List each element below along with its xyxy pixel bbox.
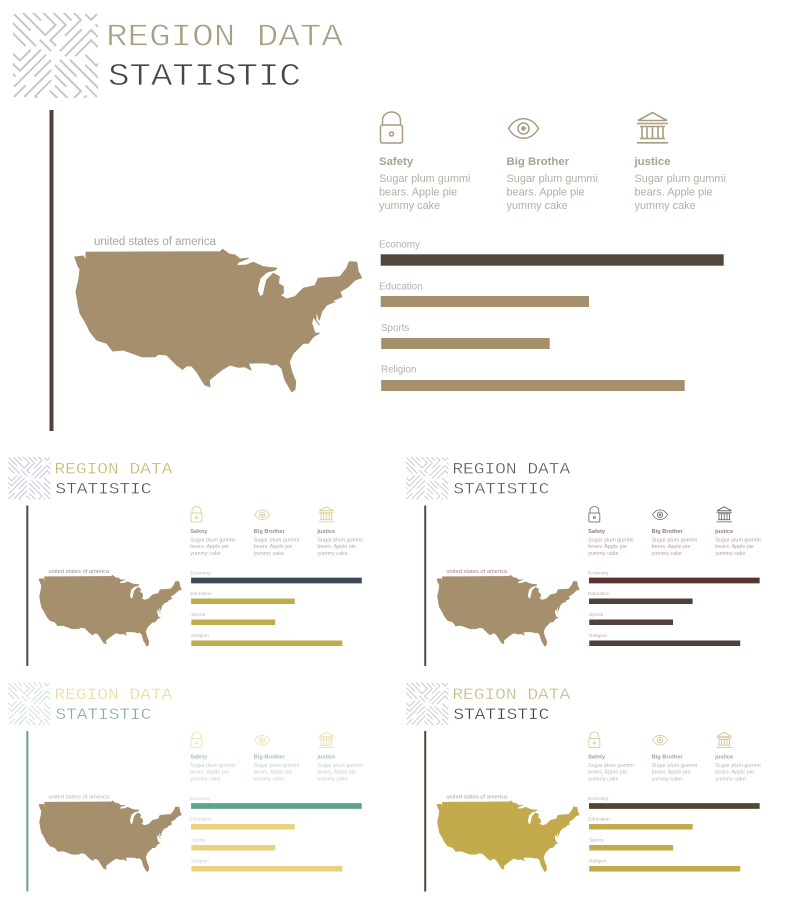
- bar chart: Economy: [190, 570, 211, 576]
- text block: big brother: yummy cake: [652, 551, 682, 557]
- text block: big brother: [652, 529, 697, 557]
- title: REGION DATA: [54, 461, 173, 479]
- bar chart: Religion: [191, 633, 209, 639]
- bar chart: Economy: [588, 796, 609, 802]
- bar chart: Religion: [589, 858, 607, 864]
- text block: safety: bears. Apple pie: [190, 544, 229, 550]
- text block: big brother: yummy cake: [254, 776, 284, 783]
- text block: safety: Sugar plum gummi: [190, 537, 236, 544]
- bar chart: Religion: [589, 633, 607, 639]
- map: USA: [39, 575, 182, 646]
- bar chart: [190, 570, 362, 646]
- text block: safety: yummy cake: [190, 551, 221, 557]
- text block: safety: [190, 754, 236, 783]
- text block: safety: bears. Apple pie: [190, 770, 229, 776]
- text block: big brother: bears. Apple pie: [254, 544, 292, 550]
- bar chart: Education: [588, 817, 610, 823]
- text block: safety: Safety: [588, 529, 606, 535]
- map: USA: [75, 249, 362, 392]
- title: [106, 20, 344, 95]
- panel: blue and gold variant: [0, 438, 363, 666]
- text block: big brother: [652, 754, 697, 783]
- icon: temple: [319, 507, 334, 522]
- bar chart: Sports: [191, 837, 206, 844]
- icon: temple: [319, 732, 334, 747]
- map label: united states of america: [446, 569, 508, 575]
- text block: justice: Sugar plum gummi: [634, 173, 726, 185]
- bar chart: Economy: [190, 796, 211, 802]
- map label: united states of america: [48, 794, 110, 801]
- text block: safety: yummy cake: [588, 551, 619, 557]
- text block: big brother: Sugar plum gummi: [506, 173, 598, 185]
- bar chart: Religion: [381, 365, 416, 376]
- text block: safety: Safety: [379, 156, 414, 168]
- icon: temple: [637, 112, 668, 143]
- map label: united states of america: [446, 794, 508, 801]
- bar chart: [588, 796, 760, 872]
- icon: eye: [255, 735, 270, 745]
- text block: justice: justice: [316, 754, 335, 761]
- pattern tile: [0, 0, 137, 137]
- text block: justice: [316, 754, 363, 783]
- text block: big brother: [254, 754, 299, 783]
- map label: united states of america: [48, 569, 110, 575]
- text block: justice: Sugar plum gummi: [715, 763, 761, 769]
- icon: lock: [380, 112, 402, 143]
- title: REGION DATA: [106, 20, 344, 56]
- pattern tile: [0, 438, 70, 519]
- icon: temple: [717, 732, 732, 747]
- text block: big brother: yummy cake: [652, 776, 682, 783]
- text block: safety: bears. Apple pie: [588, 544, 627, 550]
- text block: safety: [588, 754, 634, 783]
- text block: big brother: yummy cake: [506, 200, 568, 212]
- text block: safety: [190, 529, 236, 557]
- text block: justice: yummy cake: [317, 551, 348, 557]
- text block: safety: Sugar plum gummi: [588, 763, 634, 769]
- title: REGION DATA: [452, 687, 571, 705]
- panel: dark and gold variant: [387, 663, 761, 892]
- icon: lock: [191, 506, 202, 522]
- text block: justice: justice: [714, 529, 733, 535]
- text block: justice: justice: [714, 754, 733, 761]
- text block: big brother: Sugar plum gummi: [652, 537, 697, 544]
- title: STATISTIC: [55, 481, 151, 499]
- title: REGION DATA: [452, 461, 571, 479]
- text block: big brother: [254, 529, 299, 557]
- bar chart: Sports: [191, 612, 206, 618]
- text block: justice: Sugar plum gummi: [317, 537, 363, 544]
- title: STATISTIC: [108, 60, 301, 95]
- title: STATISTIC: [453, 707, 549, 725]
- text block: safety: bears. Apple pie: [379, 186, 457, 198]
- title: STATISTIC: [453, 481, 549, 499]
- text block: justice: yummy cake: [715, 776, 746, 783]
- vertical rule: [424, 506, 426, 666]
- text block: safety: Sugar plum gummi: [379, 173, 470, 185]
- text block: safety: [588, 529, 634, 557]
- title: [452, 687, 571, 725]
- title: [54, 461, 173, 499]
- bar chart: Economy: [588, 570, 609, 576]
- text block: justice: bears. Apple pie: [317, 544, 356, 550]
- bar chart: Economy: [379, 240, 420, 251]
- text block: justice: justice: [634, 156, 671, 168]
- icon: eye: [653, 510, 668, 520]
- text block: justice: Sugar plum gummi: [715, 537, 761, 544]
- text block: safety: yummy cake: [190, 776, 221, 783]
- title: STATISTIC: [55, 707, 151, 725]
- bar chart: Sports: [589, 837, 604, 844]
- bar chart: Sports: [589, 612, 604, 618]
- text block: big brother: bears. Apple pie: [254, 770, 292, 776]
- map: USA: [437, 575, 580, 646]
- bar chart: [588, 570, 760, 646]
- icon: temple: [717, 507, 732, 522]
- title: [452, 461, 571, 499]
- vertical rule: [26, 731, 28, 892]
- text block: justice: yummy cake: [715, 551, 746, 557]
- text block: justice: yummy cake: [634, 200, 696, 212]
- text block: justice: Sugar plum gummi: [317, 763, 363, 769]
- pattern tile: [0, 663, 70, 744]
- text block: big brother: Sugar plum gummi: [652, 763, 697, 769]
- text block: big brother: [506, 156, 598, 212]
- vertical rule: [26, 506, 28, 666]
- pattern tile: [387, 663, 468, 744]
- title: [54, 687, 173, 725]
- text block: justice: [316, 529, 363, 557]
- text block: big brother: yummy cake: [254, 551, 284, 557]
- text block: big brother: Big Brother: [652, 529, 683, 535]
- icon: eye: [653, 735, 668, 745]
- bar chart: Sports: [381, 323, 409, 334]
- text block: safety: Safety: [190, 754, 208, 761]
- map: USA: [437, 801, 580, 872]
- text block: justice: [714, 529, 761, 557]
- text block: justice: justice: [316, 529, 335, 535]
- panel: brown variant: [387, 438, 761, 666]
- text block: safety: yummy cake: [588, 776, 619, 783]
- bar chart: [379, 240, 724, 391]
- icon: lock: [191, 732, 202, 748]
- text block: big brother: bears. Apple pie: [652, 544, 690, 550]
- text block: big brother: Sugar plum gummi: [254, 763, 299, 769]
- bar chart: Religion: [191, 858, 209, 864]
- text block: justice: [634, 156, 726, 212]
- icon: eye: [508, 119, 538, 138]
- text block: justice: [714, 754, 761, 783]
- title: REGION DATA: [54, 687, 173, 705]
- text block: justice: bears. Apple pie: [317, 770, 356, 776]
- text block: safety: yummy cake: [379, 200, 440, 212]
- text block: big brother: Sugar plum gummi: [254, 537, 299, 544]
- bar chart: Education: [379, 281, 423, 292]
- text block: big brother: Big Brother: [254, 529, 286, 535]
- bar chart: [190, 796, 362, 872]
- panel: teal and yellow variant: [0, 663, 363, 892]
- vertical rule: [424, 731, 426, 892]
- text block: big brother: Big Brother: [254, 754, 286, 761]
- text block: safety: Sugar plum gummi: [190, 763, 236, 769]
- text block: big brother: bears. Apple pie: [652, 770, 690, 776]
- text block: safety: Safety: [588, 754, 606, 761]
- text block: safety: Safety: [190, 529, 208, 535]
- text block: justice: bears. Apple pie: [715, 770, 754, 776]
- map label: united states of america: [94, 236, 217, 248]
- text block: big brother: bears. Apple pie: [506, 186, 585, 198]
- text block: justice: bears. Apple pie: [715, 544, 754, 550]
- text block: justice: bears. Apple pie: [634, 186, 713, 198]
- vertical rule: [50, 110, 54, 431]
- icon: lock: [589, 732, 600, 748]
- pattern tile: [387, 438, 468, 519]
- text block: safety: bears. Apple pie: [588, 770, 627, 776]
- icon: lock: [589, 506, 600, 522]
- text block: big brother: Big Brother: [652, 754, 683, 761]
- text block: justice: yummy cake: [317, 776, 348, 783]
- bar chart: Education: [190, 817, 212, 823]
- text block: big brother: Big Brother: [506, 156, 570, 168]
- bar chart: Education: [190, 591, 212, 597]
- map: USA: [39, 801, 182, 872]
- bar chart: Education: [588, 591, 610, 597]
- text block: safety: [379, 156, 470, 212]
- icon: eye: [255, 510, 270, 520]
- text block: safety: Sugar plum gummi: [588, 537, 634, 544]
- panel: main statistic slide: [0, 0, 726, 431]
